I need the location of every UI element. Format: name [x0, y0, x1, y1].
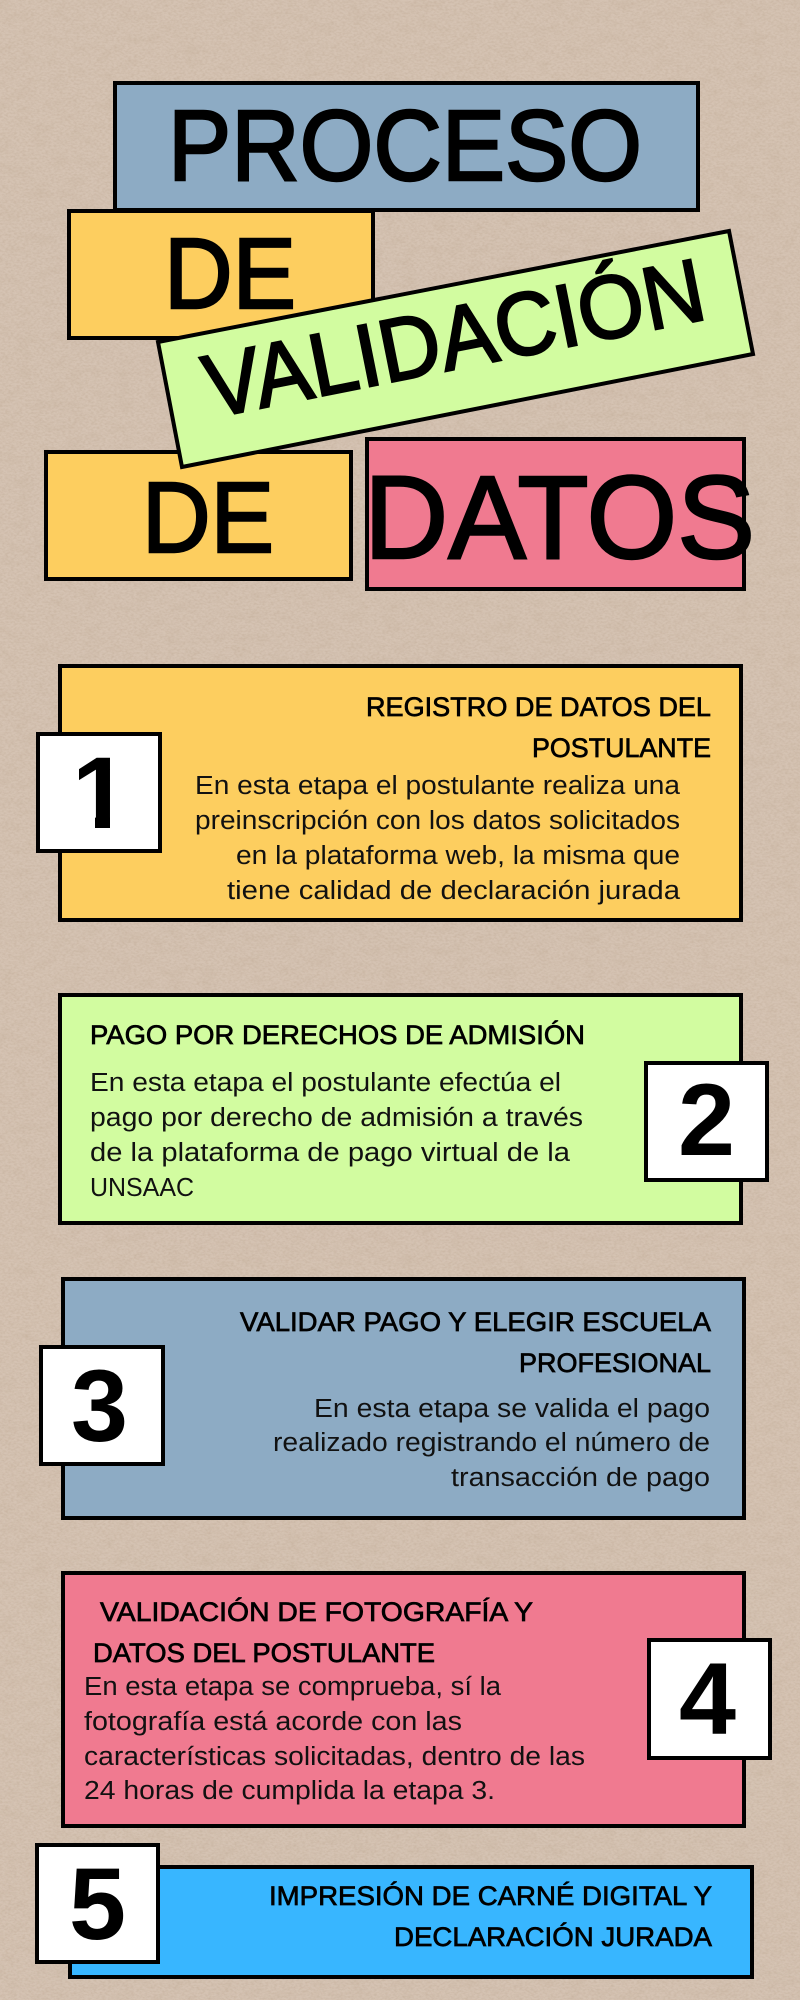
number 4: 4	[679, 1642, 736, 1756]
number 4	[649, 1640, 770, 1758]
step 2 text: UNSAAC	[90, 1174, 194, 1202]
panel: step 3	[41, 1279, 744, 1518]
title	[46, 83, 755, 589]
step 3 text: En esta etapa se valida el pago	[314, 1395, 710, 1423]
step 2 heading: PAGO POR DERECHOS DE ADMISIÓN	[90, 1019, 585, 1050]
step 1 heading: POSTULANTE	[532, 733, 711, 763]
title box: DE (lower): DE	[142, 462, 274, 574]
step 1 text	[195, 772, 681, 905]
step 4 text: fotografía está acorde con las	[84, 1708, 462, 1736]
panel: step 2	[60, 995, 767, 1223]
title box: DATOS: DATOS	[364, 452, 755, 584]
title box: DE (lower)	[46, 452, 351, 579]
step 5 heading: DECLARACIÓN JURADA	[394, 1921, 712, 1952]
step 4 heading	[93, 1596, 533, 1668]
step 4 text: En esta etapa se comprueba, sí la	[84, 1673, 502, 1701]
number 3	[41, 1347, 163, 1464]
number 1	[38, 734, 160, 851]
step 1 text: preinscripción con los datos solicitados	[195, 807, 680, 835]
number 5	[37, 1845, 158, 1962]
title box: PROCESO: PROCESO	[168, 90, 642, 202]
step 1 text: En esta etapa el postulante realiza una	[195, 772, 681, 800]
step 5 heading	[269, 1880, 712, 1952]
number 2: 2	[678, 1063, 735, 1177]
panel: step 4	[63, 1573, 770, 1826]
title box: DE (upper)	[69, 211, 373, 338]
number 5: 5	[69, 1847, 126, 1961]
step 5 heading: IMPRESIÓN DE CARNÉ DIGITAL Y	[269, 1880, 712, 1911]
step 2 text: En esta etapa el postulante efectúa el	[90, 1069, 561, 1097]
step 3 text: realizado registrando el número de	[273, 1429, 710, 1457]
number 3: 3	[71, 1349, 128, 1463]
number 2	[646, 1063, 767, 1180]
step 1 heading: REGISTRO DE DATOS DEL	[366, 692, 711, 722]
title box: DE (upper): DE	[164, 218, 296, 330]
step 4 text: 24 horas de cumplida la etapa 3.	[84, 1777, 495, 1805]
step 3 heading	[240, 1307, 711, 1378]
step 3 heading: PROFESIONAL	[519, 1348, 711, 1378]
step 2 text: pago por derecho de admisión a través	[90, 1104, 583, 1132]
number 1: 1	[72, 736, 129, 850]
step 2 text: de la plataforma de pago virtual de la	[90, 1139, 571, 1167]
step 1 heading	[366, 692, 711, 763]
step 1 text: en la plataforma web, la misma que	[236, 842, 680, 870]
step 2 text	[90, 1069, 583, 1202]
panel: step 5	[37, 1845, 752, 1977]
step 3 text: transacción de pago	[451, 1464, 710, 1492]
step 4 heading: VALIDACIÓN DE FOTOGRAFÍA Y	[100, 1596, 533, 1627]
step 1 text: tiene calidad de declaración jurada	[227, 877, 681, 905]
step 4 heading: DATOS DEL POSTULANTE	[93, 1638, 435, 1668]
panel: step 1	[38, 666, 741, 920]
step 4 text: características solicitadas, dentro de las	[84, 1743, 585, 1771]
step 3 heading: VALIDAR PAGO Y ELEGIR ESCUELA	[240, 1307, 711, 1337]
step 4 text	[84, 1673, 585, 1805]
step 3 text	[273, 1395, 710, 1492]
title box: VALIDACIÓN: VALIDACIÓN	[195, 239, 713, 437]
